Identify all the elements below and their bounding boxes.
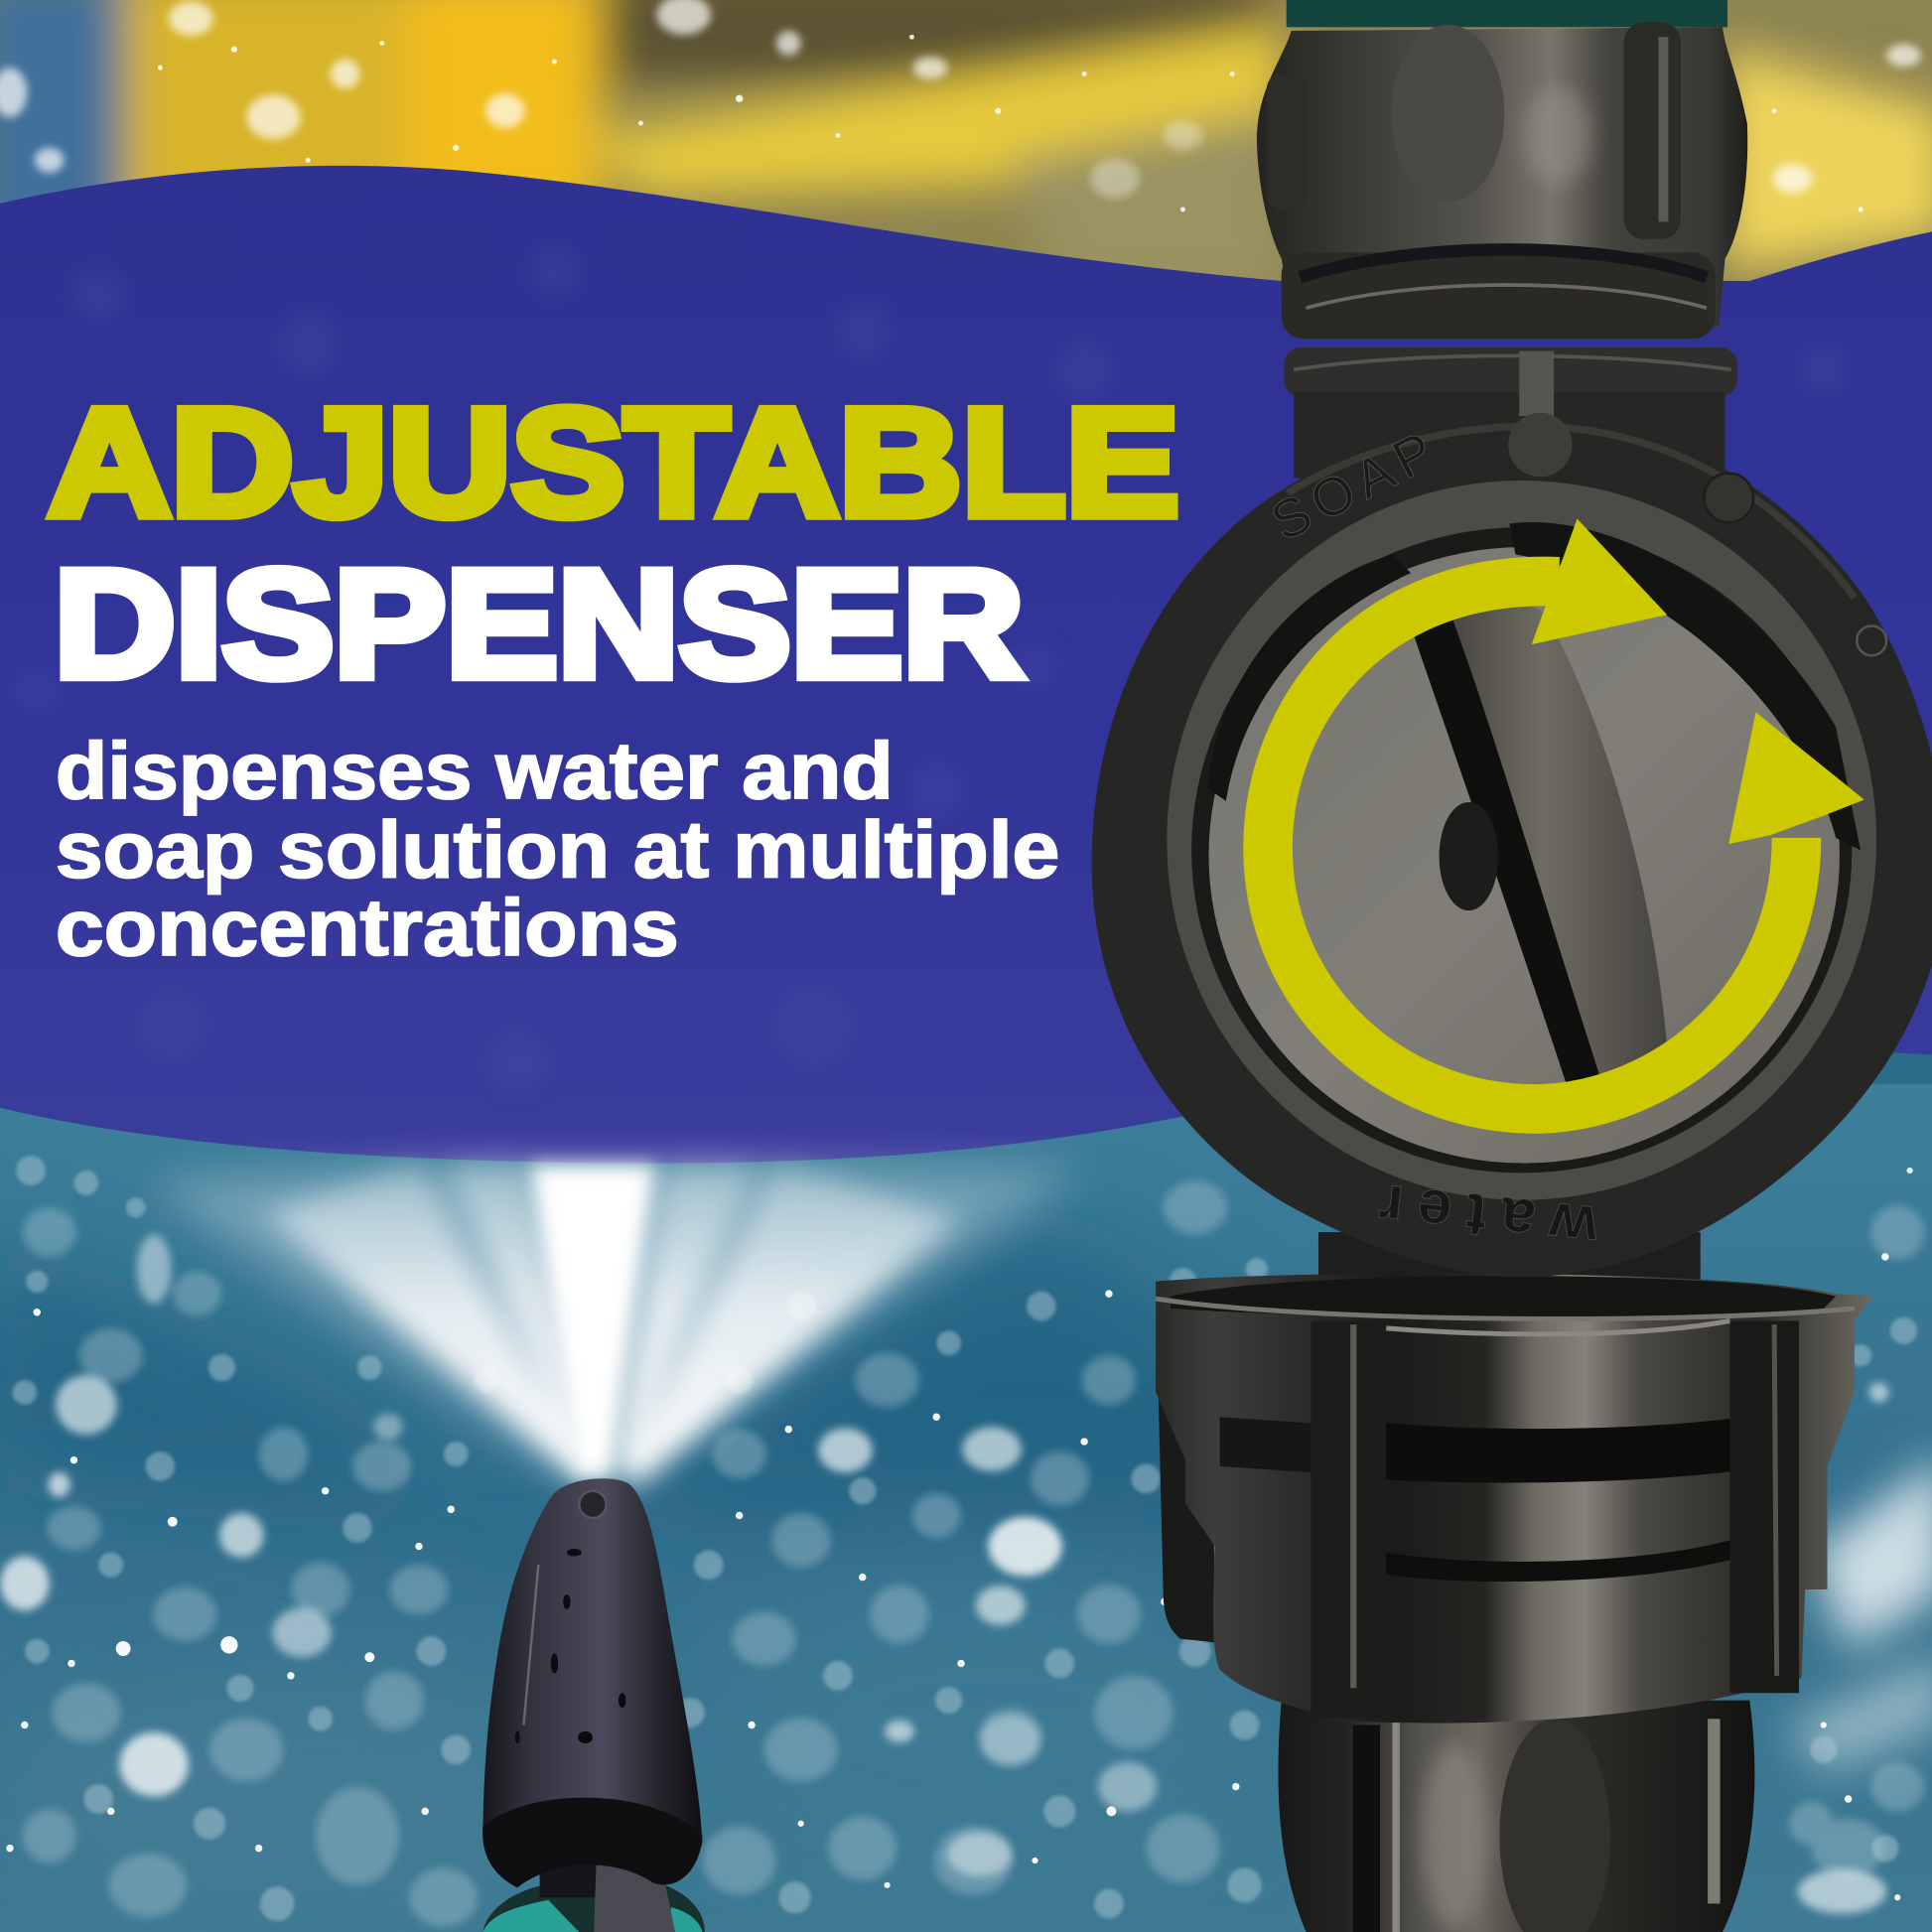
collar body (1156, 1274, 1872, 1724)
water spray fan (148, 1164, 1084, 1484)
title: DISPENSER: DISPENSER (55, 538, 1024, 709)
upper hose connector (1257, 0, 1747, 479)
yellow rotation arrow (1268, 518, 1864, 1109)
threaded nut (1257, 27, 1747, 327)
lower threaded collar (1156, 1232, 1872, 1932)
title: ADJUSTABLE: ADJUSTABLE (48, 377, 1179, 548)
spray nozzle (483, 1478, 705, 1932)
green hose (1287, 0, 1727, 27)
side clip (1159, 1390, 1215, 1642)
description text: concentrations (56, 884, 679, 973)
outer ring (1092, 416, 1932, 1277)
locking ring (1284, 347, 1737, 397)
background: yellow blurred machine at top (0, 0, 1932, 321)
description text: soap solution at multiple (56, 806, 1059, 896)
background: teal water with bubbles (0, 1084, 1932, 1932)
bottom stem (1278, 1701, 1754, 1932)
label: water: water (1375, 1171, 1601, 1262)
blue wave banner (0, 166, 1932, 1164)
description text: dispenses water and (56, 727, 894, 816)
lens window (1208, 547, 1840, 1164)
description text (56, 727, 1059, 973)
label: SOAP: SOAP (1262, 421, 1443, 553)
rotating knob (1417, 602, 1668, 1081)
mid ring (1167, 481, 1876, 1200)
selector dial (1092, 413, 1932, 1277)
